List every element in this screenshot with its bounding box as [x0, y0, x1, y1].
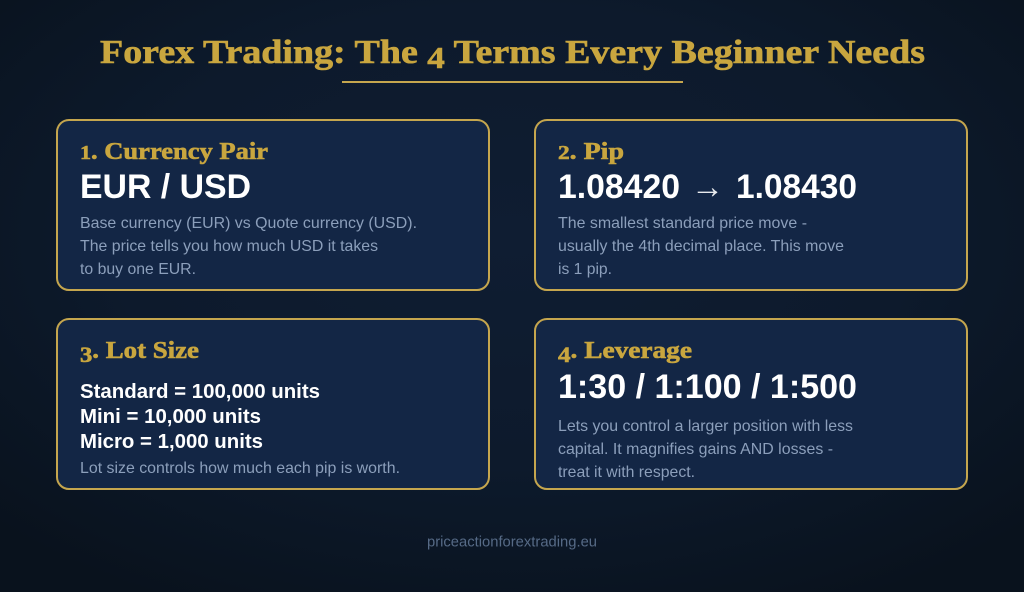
value: price move: 1.08420 — [558, 168, 680, 206]
arrow: → — [691, 169, 724, 206]
heading: leverage: 4 — [558, 342, 571, 367]
title: Forex Trading: The — [100, 34, 380, 71]
panel: currency pair — [57, 120, 489, 290]
value: leverage ratios: 1:30 / 1:100 / 1:500 — [558, 368, 857, 406]
value: price move — [558, 168, 857, 206]
panel: leverage — [535, 319, 967, 489]
value: price move: 1.08430 — [736, 168, 857, 206]
description: pip: usually the 4th decimal place. This move — [558, 238, 844, 255]
heading: lot size: 3 — [80, 342, 92, 367]
title: 4 — [427, 40, 445, 75]
description: leverage: Lets you control a larger position with less — [558, 418, 853, 435]
description: currency pair: Base currency (EUR) vs Quote currency (USD). — [80, 215, 417, 232]
footer: priceactionforextrading.eu — [427, 534, 597, 550]
heading: leverage: . Leverage — [571, 338, 692, 364]
lot size list: Micro = 1,000 units — [80, 431, 263, 453]
lot size list — [80, 381, 320, 453]
panel: pip — [535, 120, 967, 290]
description: leverage: capital. It magnifies gains AND losses - — [558, 441, 833, 458]
title: Terms Every Beginner Needs — [445, 34, 925, 71]
panel: lot size — [57, 319, 489, 489]
heading: currency pair: 1. Currency Pair — [80, 139, 268, 165]
description: pip — [558, 215, 844, 278]
description: pip: is 1 pip. — [558, 261, 612, 278]
heading: pip: 2. Pip — [558, 139, 624, 165]
lot size list: Mini = 10,000 units — [80, 406, 261, 428]
title underline — [342, 81, 683, 83]
lot size list: Standard = 100,000 units — [80, 381, 320, 403]
description: currency pair — [80, 215, 417, 278]
value: EUR / USD: EUR / USD — [80, 168, 251, 206]
description: leverage: treat it with respect. — [558, 464, 695, 481]
description: currency pair: to buy one EUR. — [80, 261, 196, 278]
description: lot size: Lot size controls how much each pip is worth. — [80, 460, 400, 477]
description: leverage — [558, 418, 853, 481]
description: currency pair: The price tells you how much USD it takes — [80, 238, 378, 255]
description: pip: The smallest standard price move - — [558, 215, 807, 232]
heading: lot size: . Lot Size — [92, 338, 199, 364]
